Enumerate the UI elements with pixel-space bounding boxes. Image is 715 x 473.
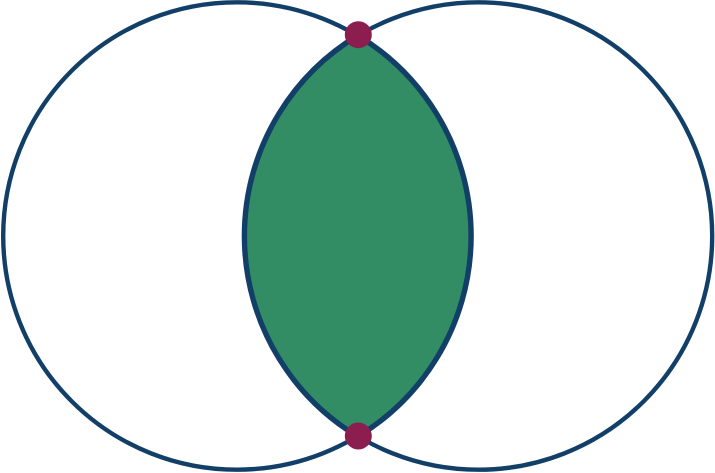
intersection point: top bbox=[345, 21, 372, 48]
intersection: green lens bbox=[244, 36, 471, 436]
circle: left bbox=[3, 2, 471, 470]
intersection point: bottom bbox=[345, 422, 372, 450]
circle: right bbox=[245, 2, 712, 470]
